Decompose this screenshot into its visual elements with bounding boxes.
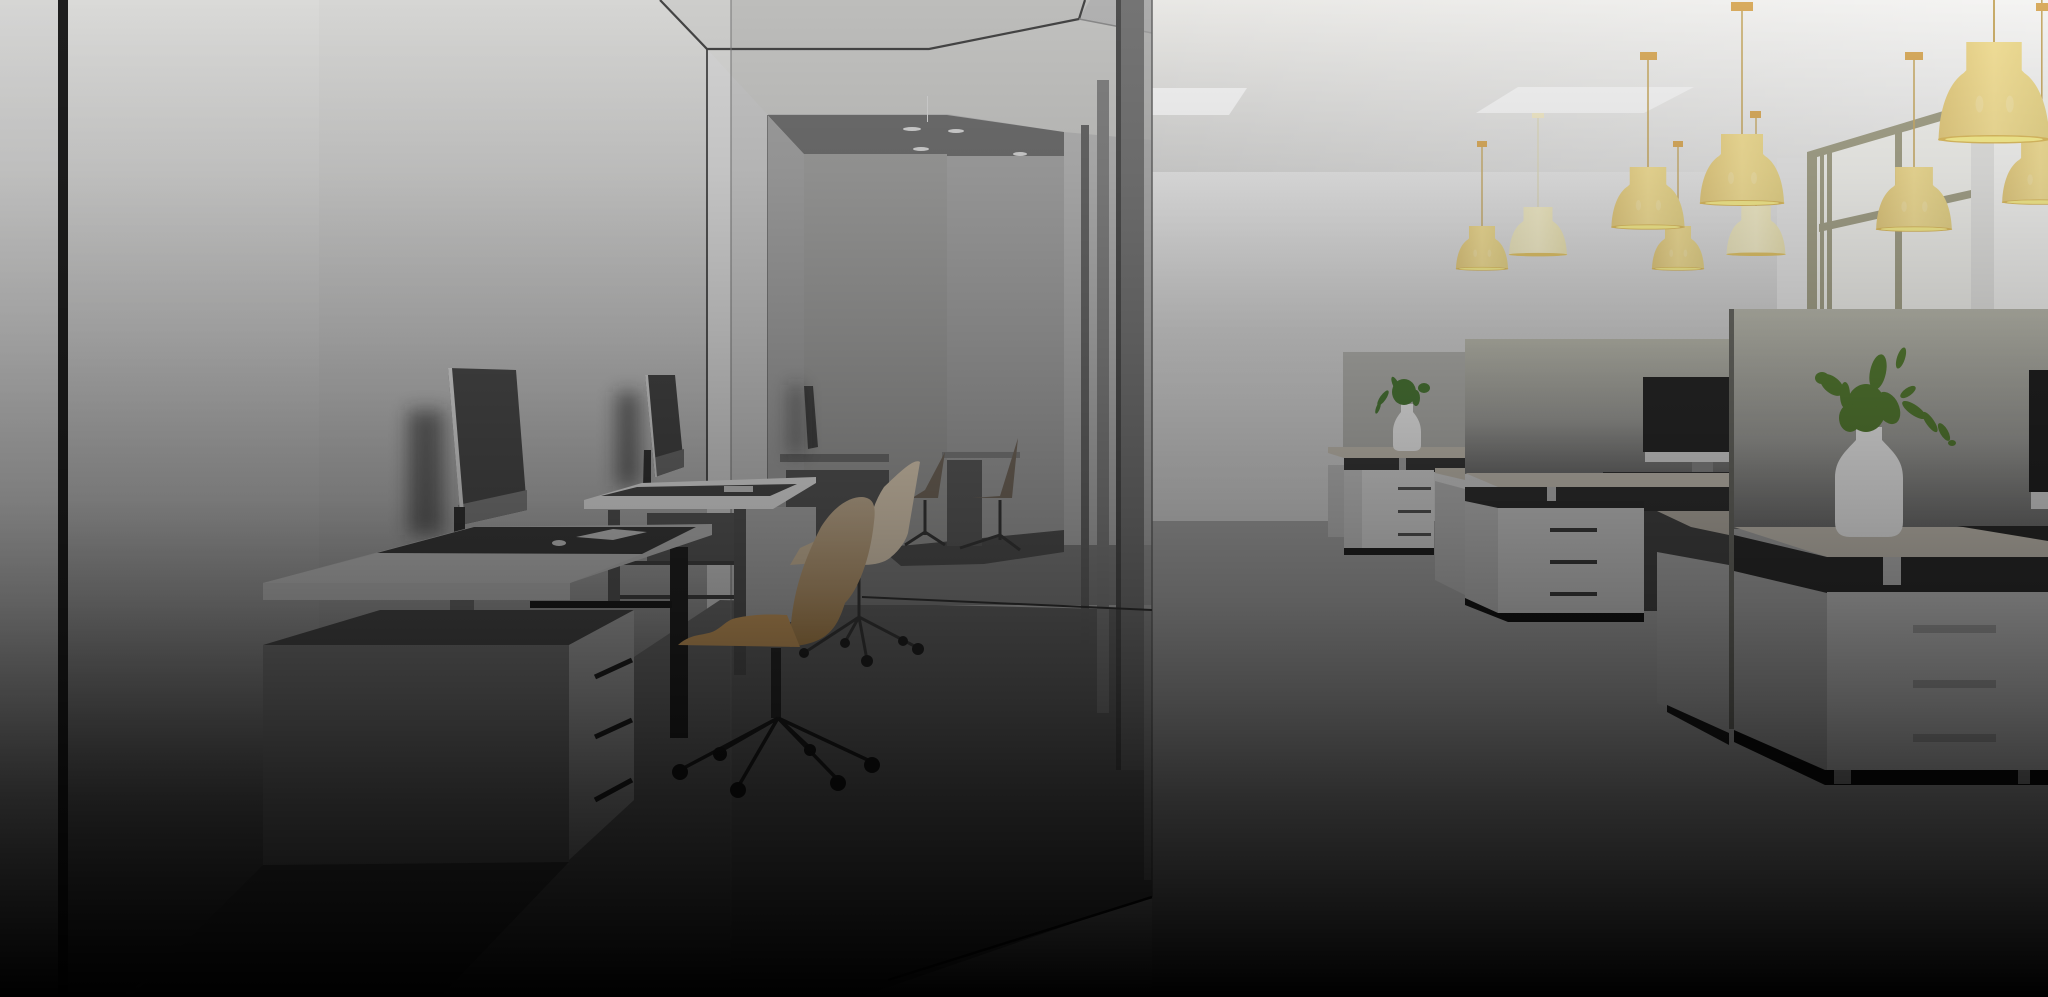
lamp 2 [1509,113,1567,256]
window on right wall [1777,86,2048,313]
desk cluster: far [1328,352,1465,555]
desk cluster: near [1657,309,2048,785]
glass office: left wall [0,0,731,997]
back office chair [790,461,924,667]
far office furniture reflection [780,386,1020,550]
left vertical black frame [58,0,68,997]
ceiling light panels [1066,87,1694,115]
lamp 3 [1652,141,1704,271]
back desk with monitor [584,375,816,675]
lamp 1 [1456,141,1508,271]
near vase with plant [1815,346,1956,537]
front office chair [672,497,880,798]
desk cluster: middle [1435,339,1729,622]
lamp 5 [1611,52,1685,230]
lamp 9 [1938,0,2048,144]
far vase with plant [1374,376,1430,451]
background: open office ceiling, wall and floor [1100,0,2048,997]
recessed ceiling lights [903,96,1027,156]
lamp 4 [1726,111,1786,256]
lamp 6 [1700,2,1784,206]
glass frame lines [660,0,1152,980]
lamp 8 [2002,0,2048,205]
glass panel tint [731,0,1152,997]
glass office: corridor ceiling and back walls [120,0,1152,997]
lamp 7 [1876,52,1952,232]
pendant lamps [1456,0,2048,271]
monitor shadows on wall [408,385,802,535]
front desk with monitor and drawers [130,368,712,997]
